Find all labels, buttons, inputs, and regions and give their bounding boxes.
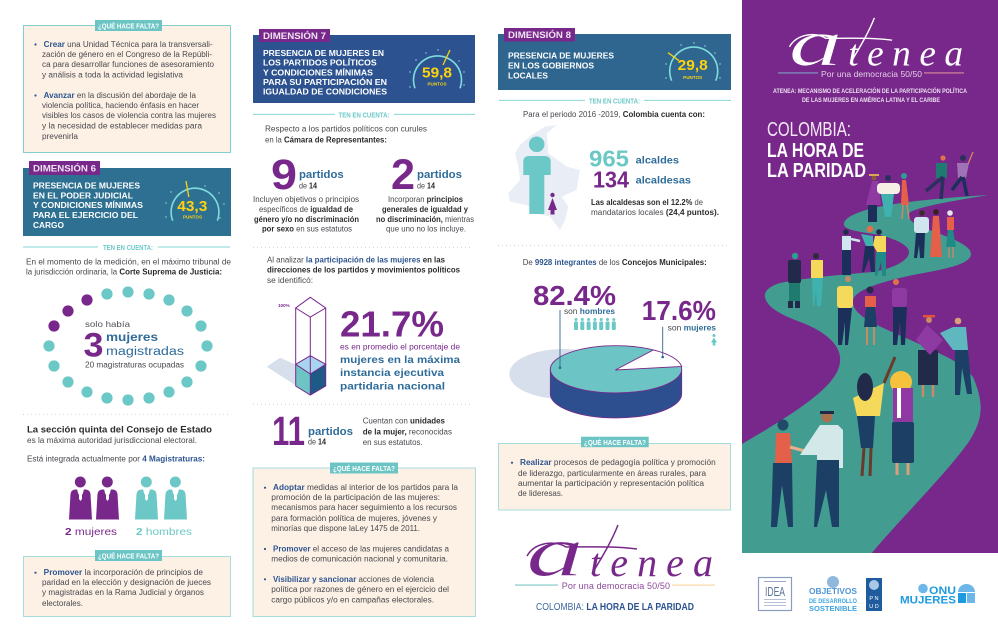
- logo: IDEA internacional: IDEA: [765, 584, 785, 599]
- logo: objetivos de desarrollo sostenible: OBJETIVOS: [809, 587, 858, 596]
- logo: atenea purple: tenea: [590, 540, 713, 585]
- stat: 2 partidos: no discriminación, mientras: [376, 215, 474, 224]
- heading: dimension 7: IGUALDAD DE CONDICIONES: [263, 87, 387, 97]
- text block: camara de representantes: Respecto a los partidos políticos con curules: [265, 124, 427, 134]
- text block: promover medios: [264, 544, 450, 564]
- heading: ten en cuenta, col 2: TEN EN CUENTA:: [338, 110, 390, 119]
- panel: que hace falta, liderazgo: [498, 437, 730, 510]
- person: woman raising arm: [853, 357, 895, 476]
- stat: 11 partidos: partidos: [308, 426, 353, 438]
- text block: adoptar: mecanismos para hacer seguimiento a los recursos: [271, 503, 457, 512]
- text block: visibilizar y sancionar: Visibilizar y sancionar acciones de violencia: [273, 575, 435, 584]
- text block: mecanismo: [773, 86, 967, 104]
- person: man yellow: [873, 229, 886, 276]
- badge: dimension 7: DIMENSIÓN 7: [263, 30, 326, 42]
- person: woman with hat: [866, 174, 881, 222]
- chart: circle of 20 magistraturas: solo había: [85, 319, 130, 329]
- stat: 9 partidos: por sexo en sus estatutos: [262, 224, 352, 234]
- stat: 82.4% son hombres: [533, 280, 616, 330]
- person: man purple: [892, 279, 907, 345]
- text block: seccion quinta: [27, 424, 212, 464]
- text block: visibilizar y sancionar: cargo públicos y/o en campañas electorales.: [271, 596, 434, 604]
- text block: promover medios: Promover el acceso de las mujeres candidatas a: [273, 544, 450, 554]
- person: woman yellow: [811, 253, 823, 306]
- logo: atenea purple: [515, 512, 715, 592]
- heading: dimension 6: PRESENCIA DE MUJERES: [33, 180, 140, 190]
- text block: adoptar: Adoptar medidas al interior de los partidos para la: [273, 483, 459, 492]
- stat: 2 partidos: de 14: [417, 182, 435, 190]
- stat: 17.6% son mujeres: [642, 295, 717, 346]
- text block: visibilizar y sancionar: [264, 575, 449, 604]
- heading: dimension 6: EN EL PODER JUDICIAL: [33, 190, 133, 200]
- stat: alcaldes y alcaldesas: Las alcaldesas son el 12.2% de: [591, 198, 704, 207]
- stat: alcaldes y alcaldesas: 965: [589, 146, 629, 172]
- title: LA PARIDAD: [767, 160, 866, 182]
- logo: atenea white: [778, 5, 964, 80]
- logo: objetivos de desarrollo sostenible: SOSTENIBLE: [809, 604, 857, 613]
- stat: 21.7%: [340, 304, 461, 392]
- stat: 11 partidos: de 14: [308, 438, 326, 446]
- chart: pie 82.4 / 17.6: [509, 310, 682, 418]
- heading: dimension 6: [33, 180, 143, 230]
- text block: crear: y análisis a toda la actividad legislativa: [42, 70, 184, 80]
- logo: atenea white: Por una democracia 50/50: [821, 69, 922, 79]
- stat: alcaldes y alcaldesas: 134: [593, 167, 629, 193]
- stat: alcaldes y alcaldesas: alcaldesas: [636, 176, 691, 186]
- person: man teal: [940, 318, 972, 395]
- text block: concejos municipales: De 9928 integrantes de los Concejos Municipales:: [523, 258, 707, 267]
- stat: 2 partidos: partidos: [417, 169, 462, 181]
- person: woman long dress: [930, 209, 942, 257]
- icon: judge woman 1: [69, 476, 92, 520]
- heading: dimension 7: [263, 48, 387, 97]
- stat: 21.7%: 21.7%: [340, 304, 444, 345]
- person: running woman: [952, 152, 973, 196]
- person: man light shirt: [914, 210, 929, 258]
- gauge: 43,3 puntos: [165, 181, 225, 221]
- text block: crear: zación de género en el Congreso de la Repúbli-: [42, 50, 212, 59]
- text block: participacion de las mujeres: direcciones de los partidos y movimientos políticos: [267, 266, 461, 274]
- text block: crear: ca para desarrollar funciones de asesoramiento: [42, 60, 215, 69]
- stat: 9 partidos: específicos de igualdad de: [259, 205, 354, 214]
- gauge: 59,8 puntos: [409, 49, 465, 88]
- text block: mecanismo: DE LAS MUJERES EN AMÉRICA LATINA Y EL CARIBE: [802, 95, 940, 104]
- logo: objetivos de desarrollo sostenible: DE DESARROLLO: [809, 599, 857, 605]
- icons: judges 2 women 2 men: 2 hombres: [136, 527, 192, 538]
- stat: 2 partidos: 2: [391, 151, 415, 199]
- heading: dimension 7: PARA SU PARTICIPACIÓN EN: [263, 76, 387, 87]
- text block: adoptar: [264, 483, 459, 533]
- title: LA HORA DE: [767, 140, 864, 162]
- person: woman grey hair: [946, 210, 956, 258]
- text block: avanzar: [34, 91, 216, 141]
- stat: alcaldes y alcaldesas: alcaldes: [636, 156, 679, 166]
- stat: 2 partidos: que uno no los incluye.: [386, 224, 466, 234]
- illustration: winding road: [742, 195, 988, 553]
- heading: dimension 8: PRESENCIA DE MUJERES: [508, 50, 614, 60]
- text block: realizar: aumentar la participación y representación política: [518, 479, 705, 488]
- gauge: 59,8 puntos: 59,8: [422, 66, 452, 82]
- heading: ten en cuenta, col 1: TEN EN CUENTA:: [103, 243, 153, 252]
- person: woman red dress: [901, 173, 909, 219]
- stat: 2 partidos: [376, 151, 474, 234]
- heading: dimension 6: CARGO: [33, 220, 64, 230]
- stat: 21.7%: es en promedio el porcentaje de: [340, 342, 461, 352]
- stat: 11 partidos: [272, 408, 452, 454]
- text block: corte suprema intro: la jurisdicción ordinaria, la Corte Suprema de Justicia:: [26, 268, 222, 276]
- heading: dimension 6: Y CONDICIONES MÍNIMAS: [33, 200, 143, 210]
- text block: promover: electorales.: [42, 599, 83, 608]
- heading: dimension 7: Y CONDICIONES MÍNIMAS: [263, 67, 373, 77]
- chart: isometric 21.7% column: 100%: [278, 303, 290, 308]
- text block: promover: [34, 568, 211, 608]
- logo: ONU mujeres: ONU: [929, 585, 956, 597]
- badge: que hace falta: ¿QUÉ HACE FALTA?: [98, 552, 159, 560]
- logo: atenea purple: Por una democracia 50/50: [562, 581, 670, 591]
- text block: avanzar: y la necesidad de establecer medidas para: [42, 122, 203, 130]
- stat: 11 partidos: Cuentan con unidades: [363, 416, 446, 426]
- logo: PNUD: U D: [869, 604, 879, 610]
- stat: 2 partidos: Incorporan principios: [388, 195, 464, 204]
- heading: dimension 7: LOS PARTIDOS POLÍTICOS: [263, 57, 377, 67]
- person: woman red hair: [861, 226, 875, 272]
- text block: participacion de las mujeres: Al analizar la participación de las mujeres en las: [267, 256, 446, 264]
- text block: realizar: de lideresas.: [518, 489, 563, 498]
- icon: judge man 2: [164, 476, 187, 520]
- logo: IDEA internacional: [758, 578, 792, 610]
- text block: participacion de las mujeres: se identificó:: [267, 276, 313, 285]
- person: man dark shirt: [788, 253, 801, 308]
- stat: alcaldes y alcaldesas: [589, 146, 719, 217]
- heading: dimension 8: [508, 50, 614, 80]
- icons: seven men: [574, 318, 616, 330]
- panel: que hace falta, judicial: [24, 550, 230, 616]
- stat: 9 partidos: 9: [271, 151, 297, 199]
- person: man pointing: [842, 229, 860, 275]
- title: COLOMBIA:: [767, 119, 851, 141]
- chart: circle of 20 magistraturas: 3: [84, 327, 104, 365]
- text block: promover: paridad en la elección y designación de jueces: [42, 578, 211, 587]
- logo: ONU mujeres: [900, 584, 975, 606]
- stat: 9 partidos: de 14: [299, 182, 317, 190]
- text block: avanzar: violencia política, haciendo énfasis en hacer: [42, 101, 199, 110]
- text block: promover: Promover la incorporación de principios de: [44, 568, 204, 577]
- icon: judge man 1: [135, 476, 158, 520]
- gauge: 43,3 puntos: PUNTOS: [183, 214, 202, 220]
- icon: judge woman 2: [96, 476, 119, 520]
- icon: colombia map with man and woman: [508, 125, 580, 230]
- person: woman navy skirt: [864, 286, 877, 345]
- title: [767, 119, 866, 182]
- text block: seccion quinta: Está integrada actualmente por 4 Magistraturas:: [27, 454, 205, 464]
- stat: 82.4% son hombres: son hombres: [564, 307, 616, 316]
- stat: 82.4% son hombres: 82.4%: [533, 280, 616, 311]
- heading: dimension 8: LOCALES: [508, 70, 548, 80]
- icons: judges 2 women 2 men: [65, 476, 192, 538]
- panel: que hace falta, partidos: [253, 462, 476, 616]
- badge: dimension 6: [29, 161, 100, 175]
- text block: realizar: Realizar procesos de pedagogía política y promoción: [520, 458, 716, 467]
- text block: camara de representantes: en la Cámara de Representantes:: [265, 136, 387, 144]
- heading: dimension 6: PARA EL EJERCICIO DEL: [33, 210, 138, 220]
- logo: PNUD: P N: [869, 596, 879, 602]
- text block: realizar: [511, 458, 716, 498]
- stat: 17.6% son mujeres: 17.6%: [642, 295, 716, 326]
- text block: participacion de las mujeres: [267, 256, 461, 285]
- text block: adoptar: minorías que dispone laLey 1475 de 2011.: [271, 524, 420, 533]
- logo: ONU mujeres: MUJERES: [900, 594, 956, 606]
- chart: circle of 20 magistraturas: magistradas: [106, 346, 184, 358]
- heading: ten en cuenta, col 3: TEN EN CUENTA:: [589, 96, 640, 105]
- text block: adoptar: para formación política de mujeres, jóvenes y: [271, 514, 437, 523]
- logo: PNUD: [866, 578, 882, 611]
- text block: crear: [34, 40, 215, 80]
- person: woman orange top: [771, 420, 812, 527]
- chart: isometric 21.7% column: [267, 297, 326, 395]
- logo: atenea purple: a: [526, 512, 584, 592]
- badge: que hace falta: ¿QUÉ HACE FALTA?: [584, 438, 646, 447]
- heading: dimension 7: PRESENCIA DE MUJERES EN: [263, 48, 384, 58]
- panel: dimension 7: [253, 29, 475, 103]
- text block: avanzar: visibles los casos de violencia contra las mujeres: [42, 111, 216, 120]
- chart: circle of 20 magistraturas: 20 magistraturas ocupadas: [85, 360, 184, 369]
- panel: cover: [742, 0, 998, 553]
- stat: 11 partidos: de la mujer, reconocidas: [363, 428, 452, 436]
- gauge: 29,8 puntos: [665, 42, 721, 81]
- illustration: people: [771, 152, 973, 527]
- panel: que hace falta, congreso: [24, 20, 230, 152]
- badge: que hace falta: ¿QUÉ HACE FALTA?: [333, 464, 395, 473]
- person: running man: [926, 155, 947, 199]
- badge: que hace falta: [95, 20, 162, 31]
- stat: 9 partidos: [253, 151, 359, 234]
- stat: alcaldes y alcaldesas: mandatarios locales (24,4 puntos).: [591, 208, 719, 217]
- chart: circle of 20 magistraturas: mujeres: [106, 332, 158, 344]
- panel: dimension 8: [498, 28, 731, 90]
- stat: 21.7%: mujeres en la máxima: [340, 354, 460, 366]
- text block: adoptar: promoción de la participación de las mujeres:: [271, 493, 440, 502]
- stat: 11 partidos: en sus estatutos.: [363, 438, 423, 447]
- person: woman white top: [877, 175, 900, 217]
- logo: atenea white: tenea: [848, 33, 963, 74]
- text block: seccion quinta: La sección quinta del Consejo de Estado: [27, 424, 212, 434]
- text block: corte suprema intro: [26, 258, 232, 276]
- badge: dimension 6: DIMENSIÓN 6: [33, 162, 96, 174]
- text block: realizar: de liderazgo, particularmente en áreas rurales, para: [518, 469, 707, 478]
- logo: objetivos de desarrollo sostenible: [809, 576, 858, 613]
- person: man light sweater: [800, 411, 843, 527]
- panel: dimension 6: [23, 161, 231, 236]
- heading: colombia la hora de la paridad: COLOMBIA: LA HORA DE LA PARIDAD: [536, 601, 694, 613]
- heading: dimension 8: EN LOS GOBIERNOS: [508, 60, 594, 70]
- stat: 9 partidos: Incluyen objetivos o principios: [253, 195, 359, 204]
- badge: que hace falta: [95, 550, 162, 561]
- text block: corte suprema intro: En el momento de la medición, en el máximo tribunal de: [26, 258, 232, 266]
- chart: circle of 20 magistraturas: [43, 286, 213, 406]
- logo: atenea white: a: [789, 5, 843, 80]
- badge: dimension 8: DIMENSIÓN 8: [508, 29, 571, 41]
- gauge: 29,8 puntos: PUNTOS: [683, 75, 702, 80]
- stat: 2 partidos: generales de igualdad y: [382, 205, 469, 214]
- person: woman with poncho: [916, 315, 943, 397]
- gauge: 59,8 puntos: PUNTOS: [427, 82, 447, 86]
- badge: que hace falta: ¿QUÉ HACE FALTA?: [98, 22, 159, 30]
- stat: 17.6% son mujeres: son mujeres: [668, 324, 717, 332]
- stat: 9 partidos: género y/o no discriminación: [254, 215, 359, 224]
- text block: promover: y magistradas en la Rama Judicial y órganos: [42, 588, 204, 597]
- text block: avanzar: Avanzar en la discusión del abordaje de la: [44, 91, 197, 100]
- icons: judges 2 women 2 men: 2 mujeres: [65, 527, 117, 538]
- text block: avanzar: prevenirla: [42, 132, 79, 141]
- gauge: 29,8 puntos: 29,8: [678, 58, 708, 74]
- text block: seccion quinta: es la máxima autoridad jurisdiccional electoral.: [27, 436, 197, 445]
- gauge: 43,3 puntos: 43,3: [177, 199, 207, 215]
- person: man yellow standing: [837, 276, 853, 345]
- text block: camara de representantes: [265, 124, 427, 144]
- person: woman blonde: [890, 371, 914, 475]
- text block: promover medios: medios de comunicación nacional y comunitaria.: [271, 554, 448, 564]
- stat: 9 partidos: partidos: [299, 169, 344, 181]
- text block: periodo 2016-2019: Para el periodo 2016 -2019, Colombia cuenta con:: [523, 110, 705, 119]
- stat: 11 partidos: 11: [272, 408, 305, 454]
- stat: 21.7%: instancia ejecutiva: [340, 367, 444, 379]
- stat: 21.7%: partidaria nacional: [340, 380, 445, 392]
- text block: crear: Crear una Unidad Técnica para la transversali-: [44, 40, 213, 49]
- text block: visibilizar y sancionar: política por razones de género en el ejercicio del: [271, 585, 449, 594]
